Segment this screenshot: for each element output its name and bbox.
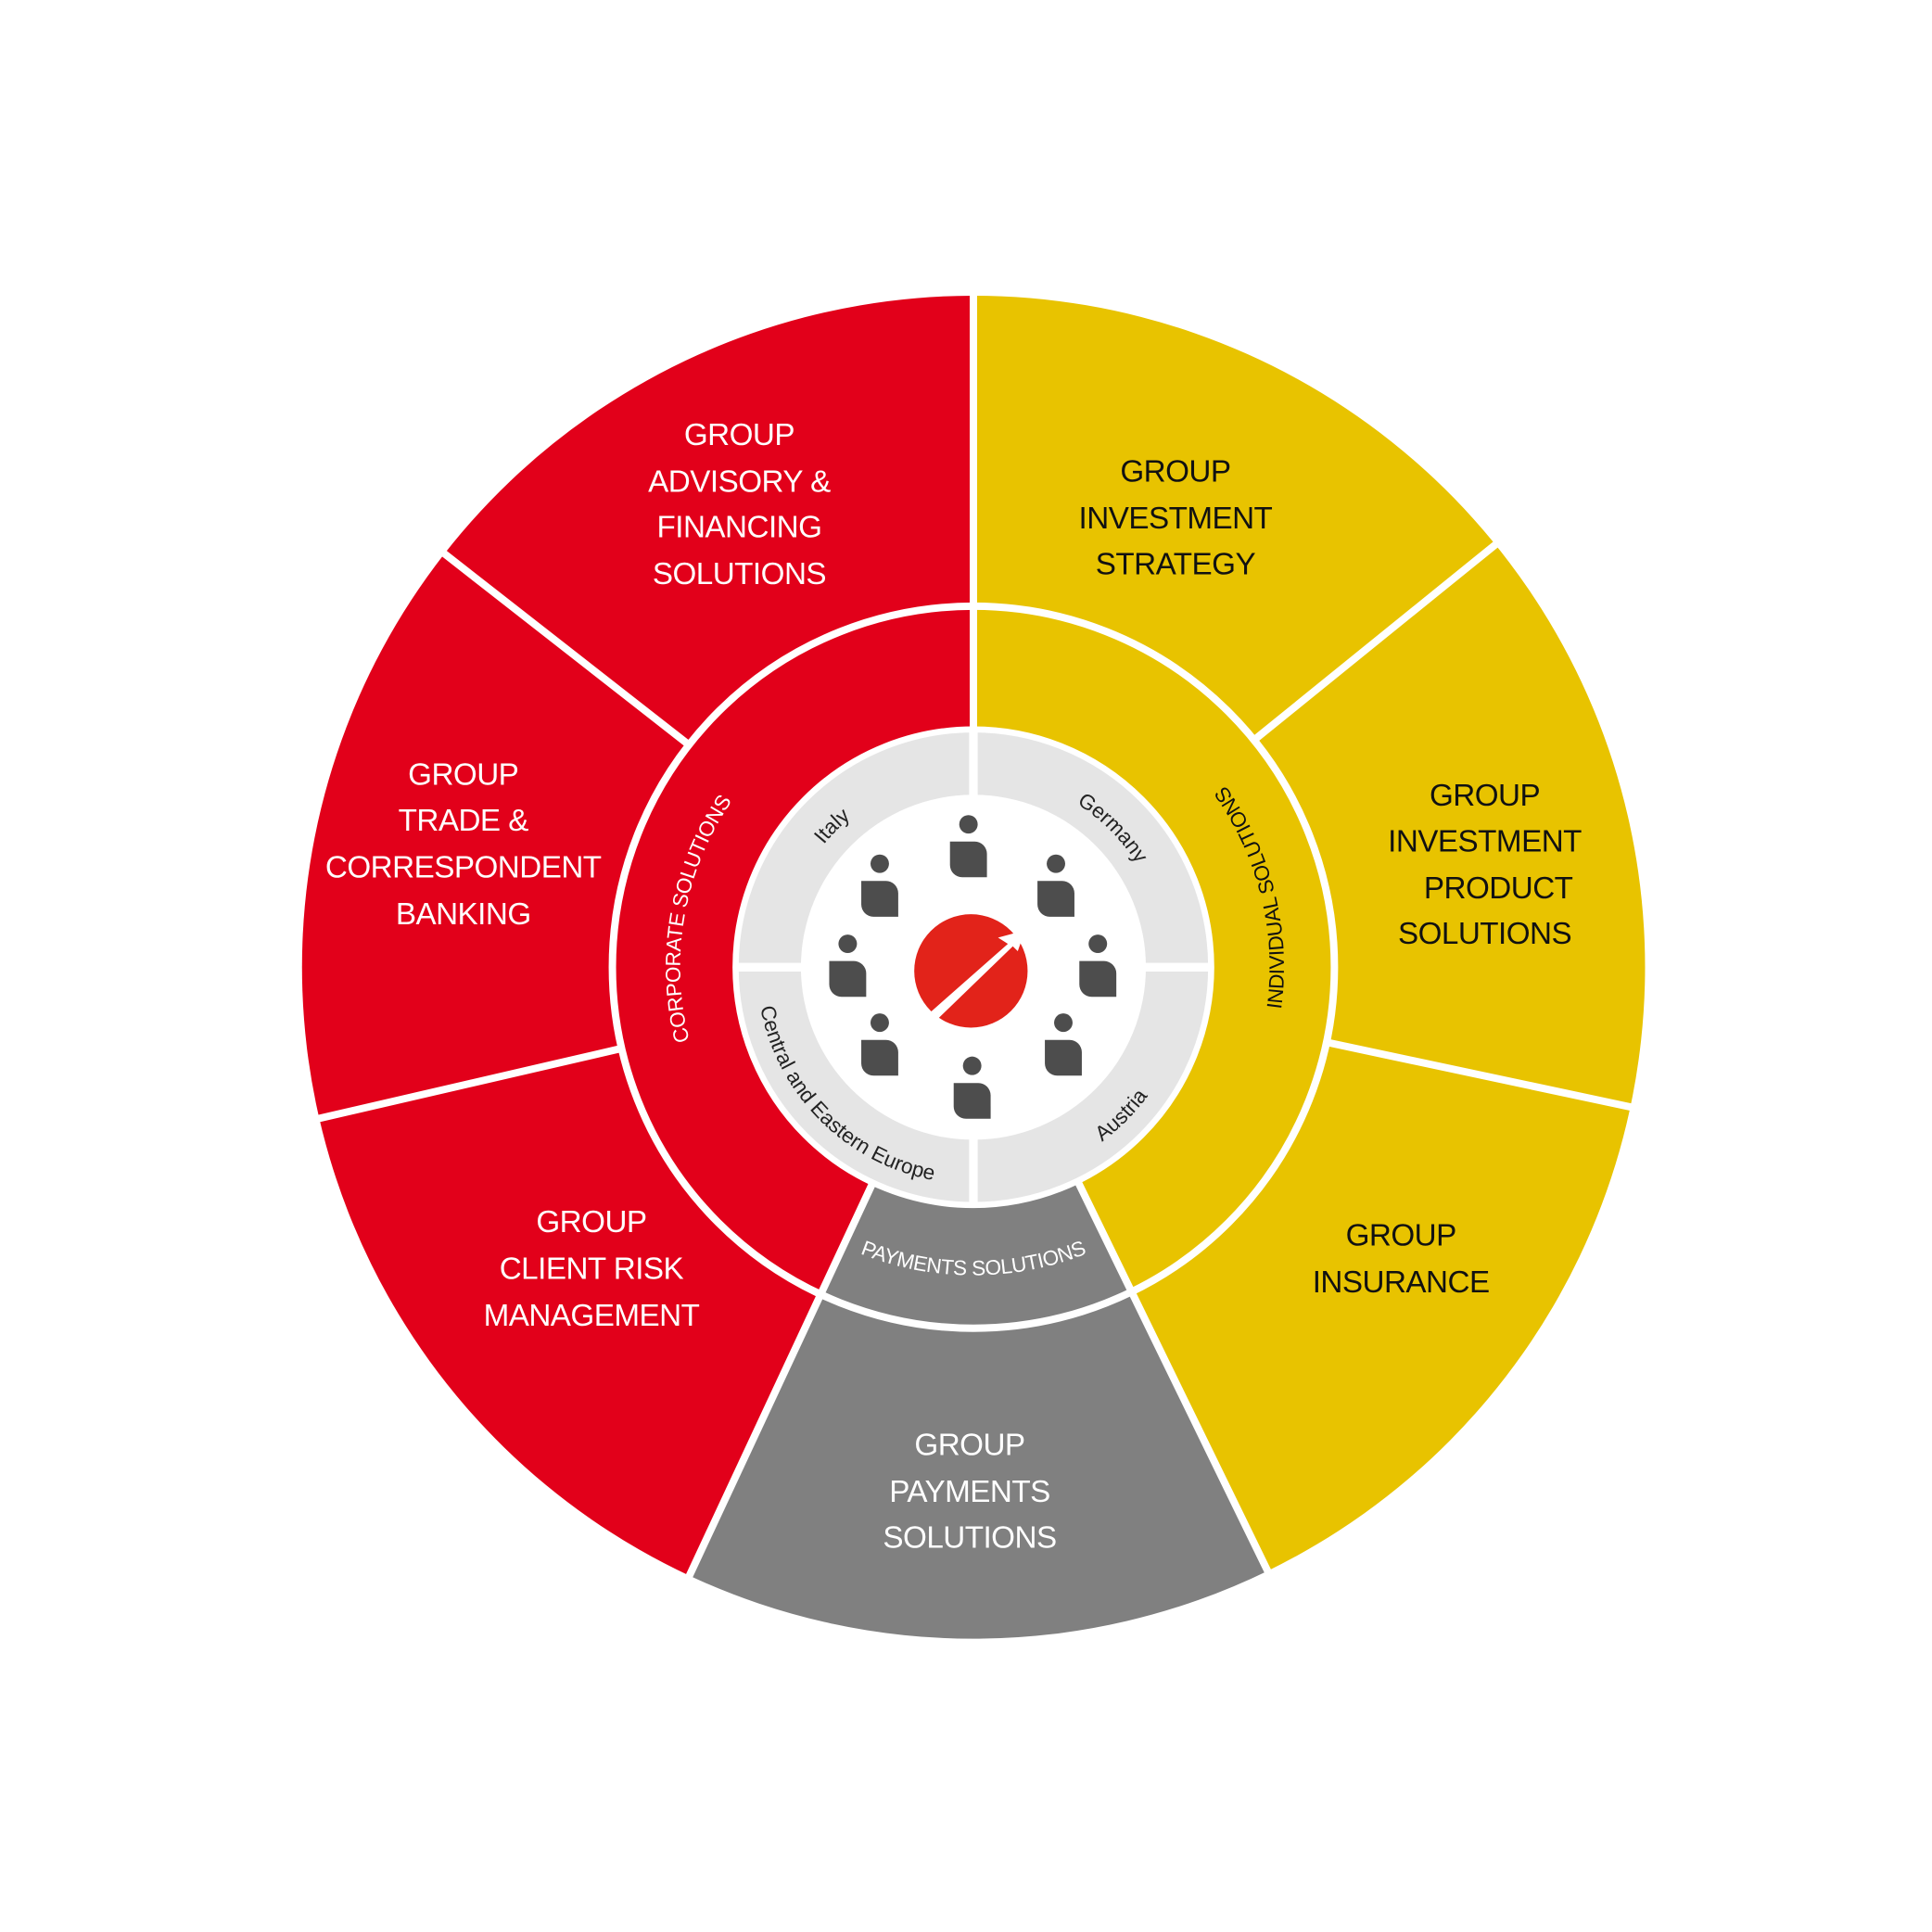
text: group investment product solutions: SOLUTIONS [1398, 917, 1571, 951]
sector: corporate (red) [302, 296, 973, 1576]
ring label: payments solutions: PAYMENTS SOLUTIONS [861, 1240, 1086, 1276]
text: group investment product solutions: GROUP [1430, 779, 1540, 813]
text: group payments solutions: GROUP [914, 1429, 1025, 1463]
text: group client risk management: CLIENT RISK [500, 1252, 684, 1287]
text: group insurance: GROUP [1346, 1219, 1456, 1253]
text: group advisory & financing solutions: SOLUTIONS [653, 557, 826, 591]
label: Italy: Italy [814, 808, 849, 844]
ring label: corporate solutions: CORPORATE SOLUTIONS [666, 795, 731, 1042]
text: group advisory & financing solutions: ADVISORY & [648, 464, 831, 499]
text: group client risk management: GROUP [536, 1205, 647, 1239]
label: Germany: Germany [1080, 794, 1146, 861]
text: group trade & correspondent banking: GROUP [408, 758, 518, 793]
text: group advisory & financing solutions: GROUP [684, 418, 794, 452]
label: Austria: Austria [1098, 1092, 1148, 1142]
text: group trade & correspondent banking: BANKING [396, 897, 531, 932]
text: group payments solutions: PAYMENTS [889, 1475, 1050, 1509]
icons: people [829, 815, 1116, 1119]
text: group investment product solutions: PRODUCT [1424, 871, 1573, 906]
text: group investment strategy: GROUP [1120, 455, 1231, 489]
text: group insurance: INSURANCE [1313, 1265, 1490, 1300]
text: group trade & correspondent banking: CORRESPONDENT [325, 850, 602, 884]
text: group client risk management: MANAGEMENT [484, 1299, 700, 1333]
text: group investment product solutions: INVESTMENT [1388, 824, 1582, 858]
ring label: individual solutions: INDIVIDUAL SOLUTIONS [1215, 788, 1284, 1008]
text: group advisory & financing solutions: FINANCING [656, 510, 821, 544]
sector: individual (yellow) [973, 296, 1645, 1571]
sector: payments (gray) [690, 967, 1267, 1639]
wheel diagram [302, 284, 1645, 1639]
label: Central and Eastern Europe: Central and Eastern Europe [762, 1007, 934, 1180]
text: group trade & correspondent banking: TRADE & [399, 804, 528, 838]
text: group investment strategy: INVESTMENT [1079, 502, 1273, 536]
logo [914, 914, 1027, 1027]
ring: countries [735, 730, 1211, 1205]
text: group payments solutions: SOLUTIONS [883, 1520, 1057, 1555]
text: group investment strategy: STRATEGY [1096, 547, 1255, 581]
